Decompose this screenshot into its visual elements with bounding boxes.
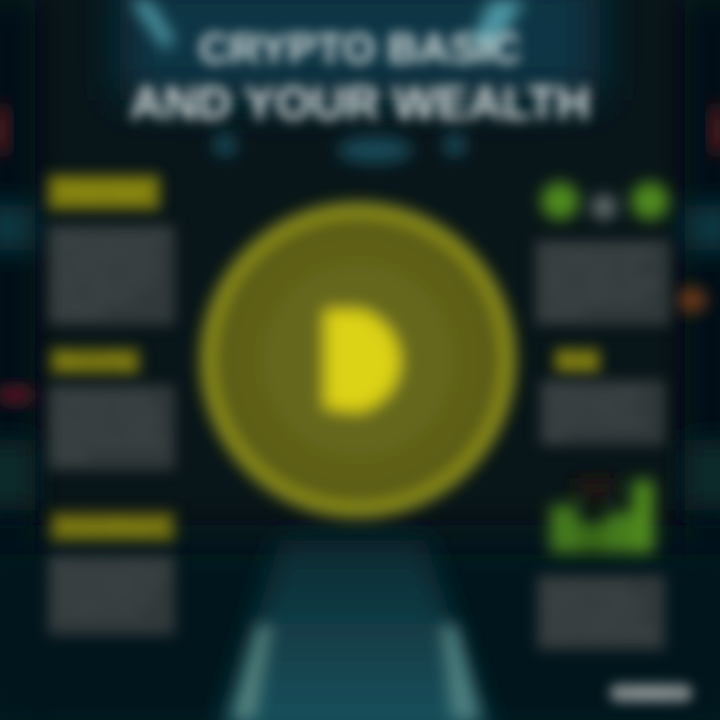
- footer logo: [610, 684, 692, 702]
- heading: right middle: Risk: [556, 350, 599, 372]
- heading: left bottom: [50, 512, 175, 542]
- text block: right middle: Markets are volatile and rules differ by country, so research first.: [546, 387, 645, 444]
- text block: left bottom: Prices move quickly, so diversify holdings and only invest what you can afford to lose.: [54, 562, 168, 619]
- heading: left top: Overview: [60, 181, 148, 203]
- text block: left middle: Private keys protect your funds, and every transaction is verified by the network before it is final.: [54, 392, 168, 464]
- heading: left middle: Security: [56, 350, 134, 372]
- text block: left top: Digital money secured by cryptography and recorded on a shared public ledger across many computers worldwide.: [54, 232, 163, 319]
- footer logo: source: [634, 687, 668, 699]
- heading: left bottom: Investment: [60, 516, 165, 538]
- text block: right bottom: Long-term growth depends on adoption, new technology and steady market demand.: [543, 582, 658, 639]
- text block: left bottom: [48, 555, 175, 635]
- title: AND YOUR WEALTH: [130, 76, 590, 129]
- text block: right top: Exchanges and wallets connect buyers and sellers, making it simple to trade digital assets any time.: [541, 247, 658, 319]
- title: CRYPTO BASIC: [199, 25, 521, 73]
- text block: right middle: [540, 380, 665, 445]
- title: [124, 24, 597, 129]
- heading: left top: [48, 175, 160, 210]
- text block: right bottom: [537, 575, 665, 650]
